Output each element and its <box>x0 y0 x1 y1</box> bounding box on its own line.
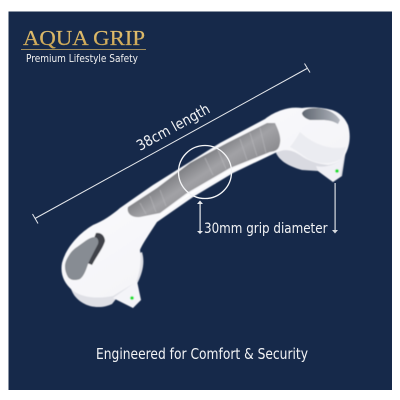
product: grab bar <box>61 107 350 308</box>
white highlight beneath grip <box>160 155 268 216</box>
left lever shaft <box>85 233 105 265</box>
brand logo <box>21 26 146 65</box>
gold rule <box>21 49 146 50</box>
label: 38cm length: 38cm length <box>134 101 213 155</box>
right green dot <box>335 169 339 173</box>
caption: Engineered for Comfort & Security <box>96 345 308 363</box>
grip rib highlights <box>140 128 266 214</box>
left green dot <box>130 296 134 300</box>
right suction base <box>276 140 346 182</box>
label: 30mm grip diameter: 30mm grip diameter <box>204 221 328 237</box>
left grey lever <box>65 237 98 280</box>
right tab <box>316 157 344 182</box>
bar and head bodies <box>61 107 350 298</box>
left tab <box>113 281 141 308</box>
callout circle: grip detail <box>178 146 232 198</box>
arrow: grip diameter <box>197 200 203 234</box>
right head shading <box>290 132 346 163</box>
right release button <box>302 108 340 124</box>
arrow: length dimension line <box>32 64 310 224</box>
ribbed grey grip <box>128 123 280 217</box>
tagline: Premium Lifestyle Safety <box>26 53 138 65</box>
left suction base <box>70 252 143 307</box>
title: AQUA GRIP: AQUA GRIP <box>23 26 145 50</box>
arrow: right head drop line <box>332 183 338 234</box>
